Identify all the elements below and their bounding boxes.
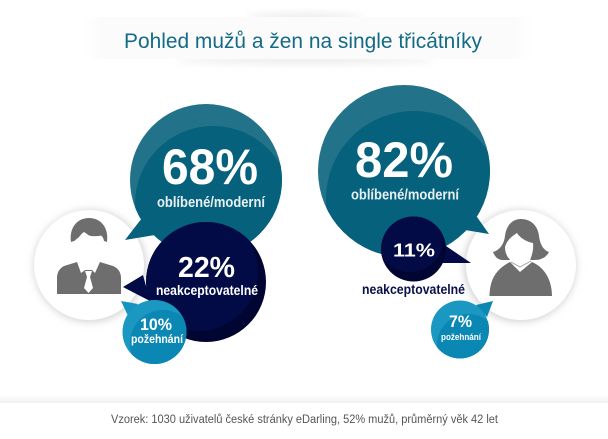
title banner: [84, 14, 532, 63]
label: unacceptable: neakceptovatelné: [362, 281, 465, 297]
speech bubble: 10% blessing: [121, 300, 186, 364]
footer: sample note: [0, 395, 608, 439]
value: 10%: [140, 315, 172, 334]
value: 68%: [162, 139, 258, 195]
label: požehnání: [131, 332, 184, 346]
panel: men: [34, 104, 291, 376]
icon: woman avatar: [464, 210, 576, 322]
footer: sample note: Vzorek: 1030 uživatelů české stránky eDarling, 52% mužů, průměrný věk 42 let: [111, 414, 499, 426]
speech bubble: 82% favourite: [318, 85, 490, 254]
icon: man avatar: [34, 210, 146, 322]
title: Pohled mužů a žen na single třicátníky: [124, 30, 482, 53]
label: požehnání: [441, 332, 481, 343]
speech bubble: 11% unacceptable: [381, 216, 471, 282]
value: 11%: [393, 240, 435, 260]
value: 82%: [355, 132, 453, 188]
panel: women: [318, 85, 576, 376]
label: oblíbené/moderní: [157, 194, 266, 211]
label: oblíbené/moderní: [351, 186, 460, 204]
speech bubble: 68% favourite: [125, 104, 282, 242]
label: neakceptovatelné: [156, 282, 258, 298]
speech bubble: 22% unacceptable: [123, 213, 266, 342]
value: 7%: [449, 312, 472, 331]
value: 22%: [178, 252, 235, 284]
speech bubble: 7% blessing: [431, 300, 493, 358]
